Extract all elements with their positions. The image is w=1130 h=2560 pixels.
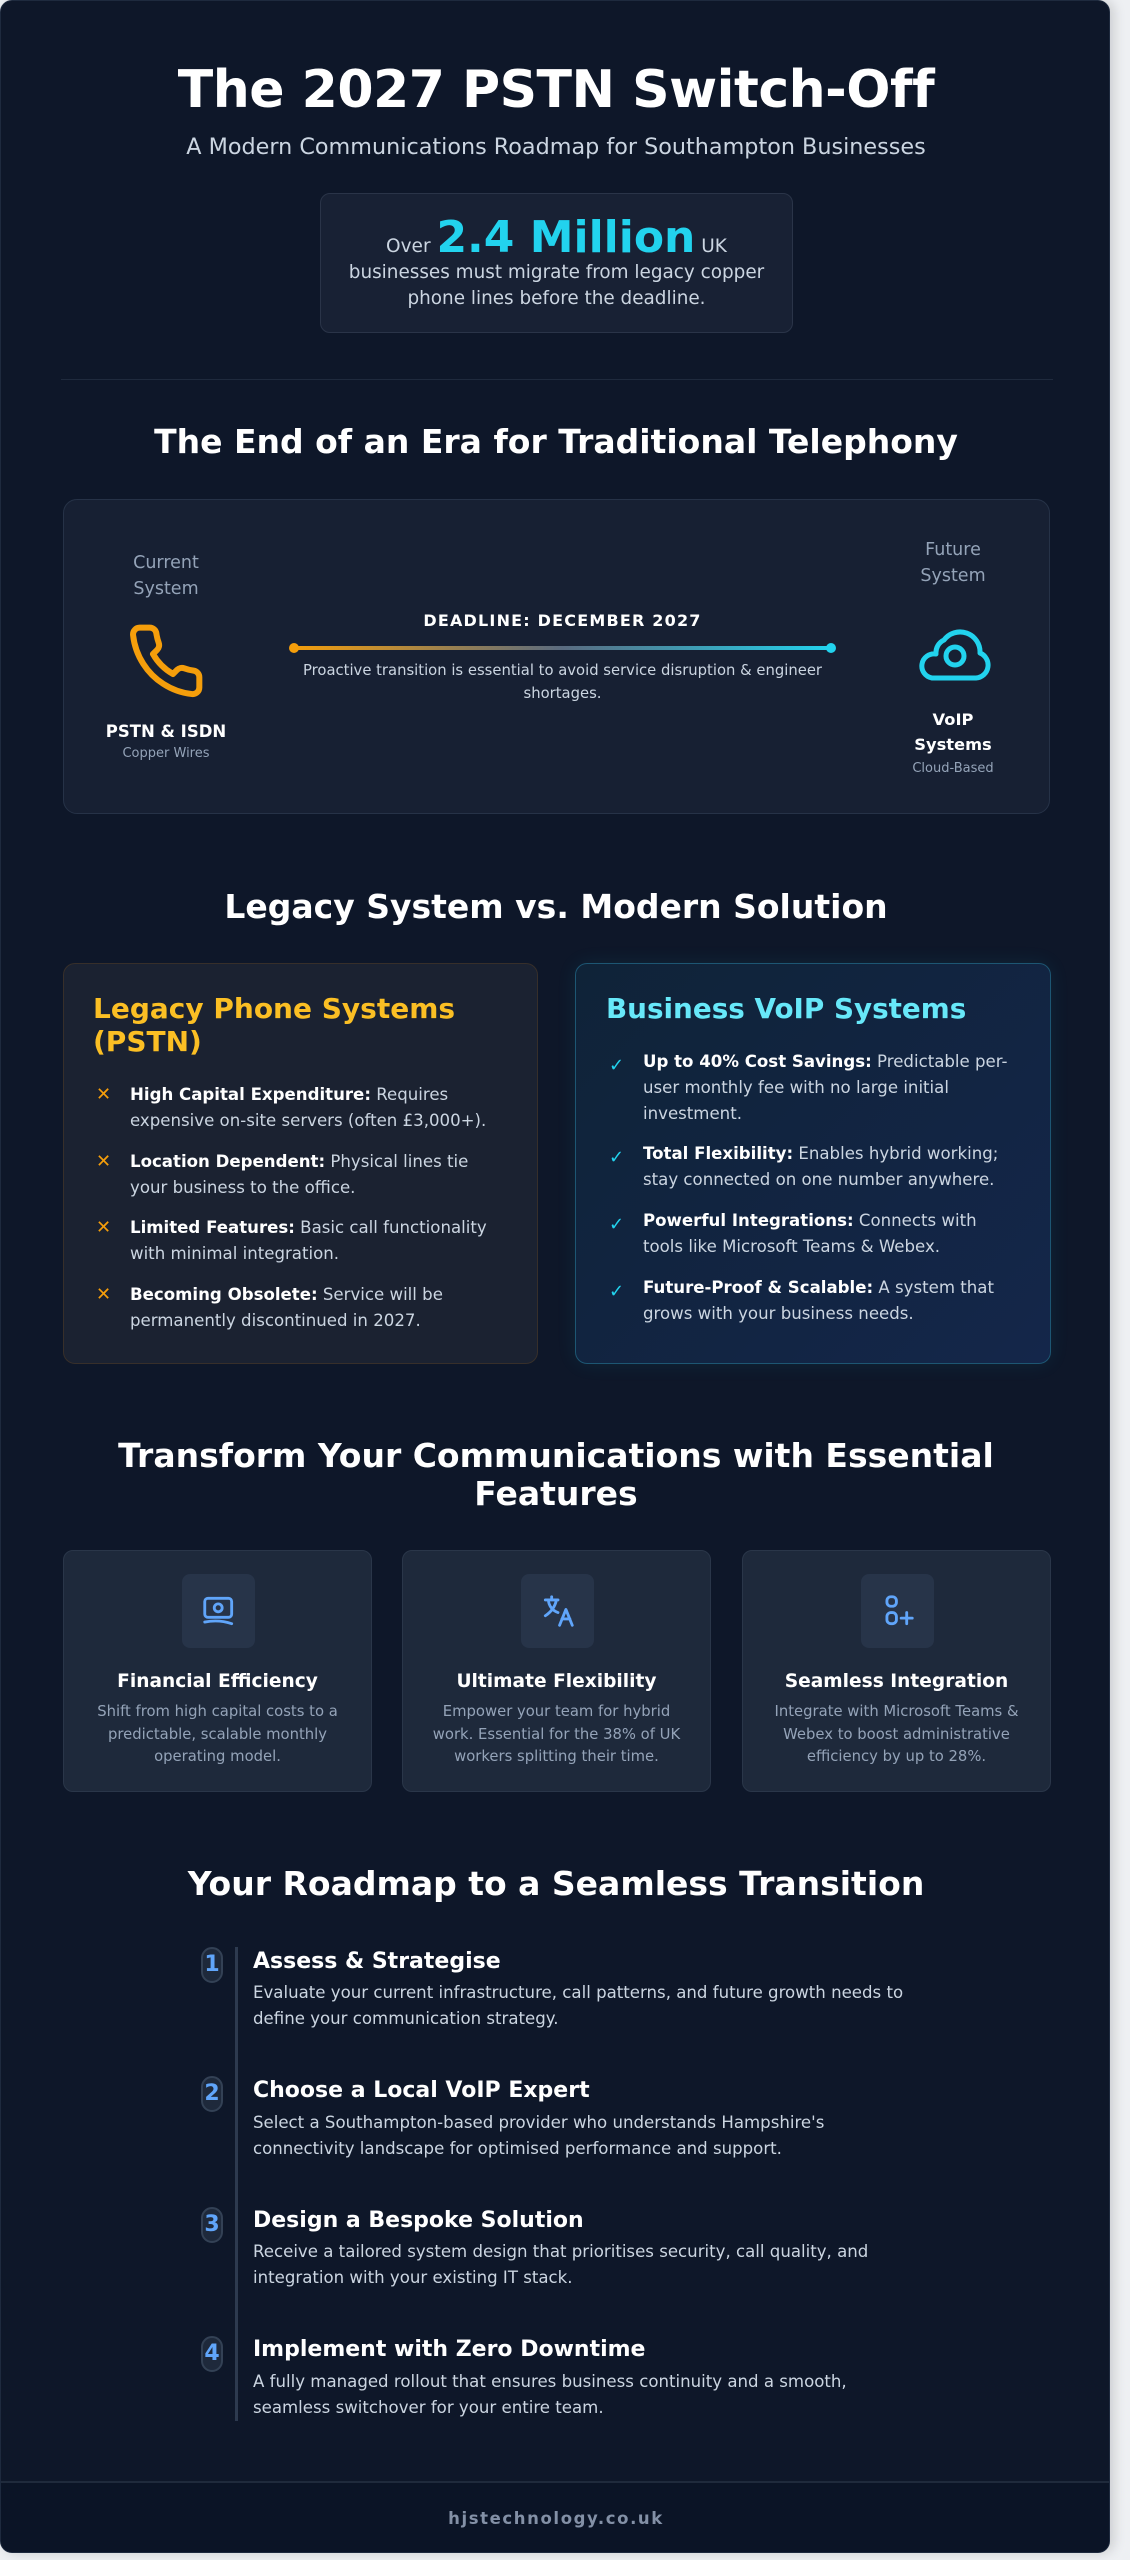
item bbox=[96, 1217, 487, 1263]
timeline note: Proactive transition is essential to avoid service disruption & engineer bbox=[303, 662, 822, 679]
subtitle: A Modern Communications Roadmap for Southampton Businesses bbox=[186, 134, 926, 160]
legacy items: with minimal integration. bbox=[130, 1244, 339, 1263]
step 1: Evaluate your current infrastructure, call patterns, and future growth needs to bbox=[253, 1983, 903, 2002]
voip items: tools like Microsoft Teams & Webex. bbox=[643, 1237, 940, 1256]
voip items: ✓ bbox=[609, 1214, 624, 1235]
legacy items: Location Dependent: Physical lines tie bbox=[130, 1152, 468, 1171]
item bbox=[609, 1211, 977, 1256]
heading: end of an era: The End of an Era for Traditional Telephony bbox=[154, 422, 958, 461]
step 1: define your communication strategy. bbox=[253, 2009, 559, 2028]
icon: phone bbox=[130, 624, 202, 698]
legacy items: Becoming Obsolete: Service will be bbox=[130, 1285, 443, 1304]
legacy items: ✕ bbox=[96, 1084, 111, 1105]
step 3: integration with your existing IT stack. bbox=[253, 2268, 573, 2287]
stat text: phone lines before the deadline. bbox=[407, 288, 706, 309]
future system label: System bbox=[920, 566, 986, 586]
icon: integration bbox=[861, 1574, 934, 1648]
VoIP label: VoIP bbox=[933, 710, 973, 729]
VoIP label: Systems bbox=[914, 735, 992, 754]
feature card: financial bbox=[63, 1550, 372, 1792]
feature card: integration: Seamless Integration bbox=[785, 1671, 1008, 1692]
heading: features bbox=[118, 1436, 994, 1513]
panel: timeline bbox=[63, 499, 1050, 814]
legacy items: expensive on-site servers (often £3,000+). bbox=[130, 1111, 486, 1130]
cloud based: Cloud-Based bbox=[912, 761, 994, 776]
voip items: investment. bbox=[643, 1104, 742, 1123]
feature card: financial: predictable, scalable monthly bbox=[108, 1726, 327, 1742]
feature card: flexibility bbox=[402, 1550, 711, 1792]
heading: legacy vs modern: Legacy System vs. Modern Solution bbox=[224, 887, 888, 926]
feature card: integration: Integrate with Microsoft Teams & bbox=[774, 1703, 1018, 1720]
step 1 bbox=[201, 1947, 903, 2028]
timeline note: shortages. bbox=[523, 684, 602, 702]
legacy items: ✕ bbox=[96, 1217, 111, 1238]
step 1: Assess & Strategise bbox=[253, 1949, 501, 1974]
legacy heading bbox=[93, 992, 455, 1058]
voip items: Future-Proof & Scalable: A system that bbox=[643, 1278, 994, 1297]
voip items: ✓ bbox=[609, 1147, 624, 1168]
current system label: System bbox=[133, 579, 199, 599]
step 3: Receive a tailored system design that prioritises security, call quality, and bbox=[253, 2242, 868, 2261]
copper wires: Copper Wires bbox=[122, 746, 210, 761]
future system label bbox=[920, 540, 986, 586]
VoIP label bbox=[914, 710, 992, 754]
legacy heading: Legacy Phone Systems bbox=[93, 992, 455, 1025]
deadline label: DEADLINE: DECEMBER 2027 bbox=[423, 611, 702, 630]
feature card: integration: efficiency by up to 28%. bbox=[807, 1748, 986, 1765]
legacy items: your business to the office. bbox=[130, 1178, 355, 1197]
voip items: grows with your business needs. bbox=[643, 1304, 914, 1323]
timeline note bbox=[303, 662, 822, 702]
item bbox=[609, 1144, 998, 1189]
heading: features: Transform Your Communications with Essential bbox=[118, 1436, 994, 1475]
legacy items: permanently discontinued in 2027. bbox=[130, 1311, 421, 1330]
current system label bbox=[133, 553, 199, 599]
voip items: Powerful Integrations: Connects with bbox=[643, 1211, 977, 1230]
item bbox=[609, 1052, 1007, 1123]
icon: cloud bbox=[919, 629, 991, 680]
timeline arrow bbox=[292, 646, 833, 650]
item bbox=[96, 1284, 443, 1330]
item bbox=[609, 1278, 994, 1323]
item bbox=[96, 1084, 486, 1130]
feature card: flexibility: workers splitting their time. bbox=[454, 1748, 659, 1765]
legacy items: ✕ bbox=[96, 1284, 111, 1305]
PSTN label: PSTN & ISDN bbox=[106, 722, 226, 741]
legacy items bbox=[96, 1084, 487, 1330]
heading: features: Features bbox=[474, 1474, 638, 1513]
feature card: flexibility: Empower your team for hybrid bbox=[443, 1703, 670, 1720]
feature card: financial: Shift from high capital costs to a bbox=[97, 1703, 338, 1720]
panel: voip bbox=[575, 963, 1051, 1364]
legacy heading: (PSTN) bbox=[93, 1025, 202, 1058]
heading: roadmap: Your Roadmap to a Seamless Transition bbox=[188, 1864, 924, 1903]
stat text: businesses must migrate from legacy copper bbox=[349, 262, 764, 283]
step 4: seamless switchover for your entire team. bbox=[253, 2398, 604, 2417]
feature card: financial: Financial Efficiency bbox=[117, 1671, 318, 1692]
footer bbox=[1, 2481, 1111, 2554]
stat headline: Over 2.4 Million UK bbox=[386, 212, 727, 263]
legacy items: High Capital Expenditure: Requires bbox=[130, 1085, 448, 1104]
step 2: 2 bbox=[204, 2081, 220, 2106]
feature card: financial: operating model. bbox=[154, 1748, 281, 1765]
step 4: Implement with Zero Downtime bbox=[253, 2337, 645, 2362]
feature card: flexibility: work. Essential for the 38% of UK bbox=[433, 1726, 680, 1742]
icon: money bbox=[182, 1574, 255, 1648]
item bbox=[96, 1151, 468, 1197]
step 3: Design a Bespoke Solution bbox=[253, 2208, 584, 2233]
feature card: integration: Webex to boost administrative bbox=[783, 1726, 1010, 1742]
voip items: Up to 40% Cost Savings: Predictable per- bbox=[643, 1052, 1007, 1071]
future system label: Future bbox=[925, 540, 981, 560]
stat box bbox=[320, 193, 793, 333]
step 4: 4 bbox=[204, 2341, 220, 2366]
feature card: flexibility: Ultimate Flexibility bbox=[456, 1671, 657, 1692]
voip heading: Business VoIP Systems bbox=[606, 992, 966, 1025]
step 3: 3 bbox=[204, 2212, 220, 2237]
feature card: integration bbox=[742, 1550, 1051, 1792]
step 1: 1 bbox=[204, 1952, 220, 1977]
step 4 bbox=[201, 2336, 847, 2417]
icon: translate bbox=[521, 1574, 594, 1648]
roadmap timeline bbox=[235, 1947, 238, 2421]
step 4: A fully managed rollout that ensures business continuity and a smooth, bbox=[253, 2372, 847, 2391]
step 3 bbox=[201, 2207, 868, 2287]
panel: legacy bbox=[63, 963, 538, 1364]
voip items: user monthly fee with no large initial bbox=[643, 1078, 949, 1097]
stat text bbox=[349, 262, 764, 309]
footer text: hjstechnology.co.uk bbox=[448, 2509, 664, 2528]
voip items: ✓ bbox=[609, 1281, 624, 1302]
legacy items: Limited Features: Basic call functionality bbox=[130, 1218, 487, 1237]
title: The 2027 PSTN Switch-Off bbox=[178, 60, 934, 120]
voip items: Total Flexibility: Enables hybrid working; bbox=[643, 1144, 998, 1163]
voip items: ✓ bbox=[609, 1055, 624, 1076]
voip items: stay connected on one number anywhere. bbox=[643, 1170, 994, 1189]
voip items bbox=[609, 1052, 1007, 1323]
step 2 bbox=[201, 2076, 824, 2158]
current system label: Current bbox=[133, 553, 199, 573]
legacy items: ✕ bbox=[96, 1151, 111, 1172]
step 2: connectivity landscape for optimised performance and support. bbox=[253, 2139, 782, 2158]
step 2: Select a Southampton-based provider who understands Hampshire's bbox=[253, 2113, 824, 2132]
step 2: Choose a Local VoIP Expert bbox=[253, 2078, 590, 2103]
